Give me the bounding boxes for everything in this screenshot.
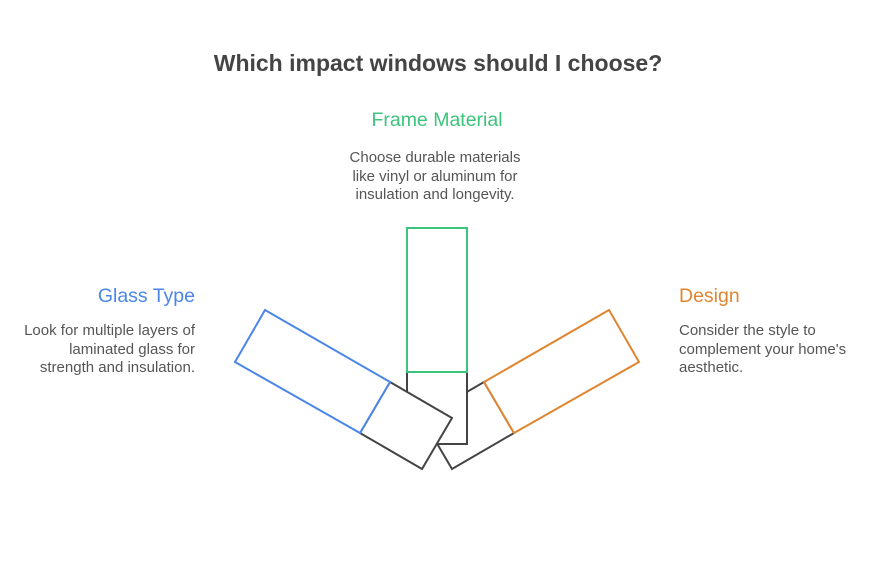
- heading: frame material: Frame Material: [371, 109, 503, 131]
- window: design (orange): [422, 310, 639, 469]
- text: design: [679, 322, 846, 376]
- text: frame material: like vinyl or aluminum for: [352, 168, 518, 184]
- text: design: aesthetic.: [679, 359, 743, 376]
- title: Which impact windows should I choose?: [214, 50, 662, 76]
- text: frame material: [350, 149, 520, 203]
- text: glass type: strength and insulation.: [40, 359, 195, 376]
- text: glass type: Look for multiple layers of: [24, 322, 195, 339]
- text: glass type: laminated glass for: [69, 340, 195, 358]
- text: frame material: insulation and longevity.: [356, 186, 514, 203]
- text: design: complement your home's: [679, 340, 846, 358]
- window: glass type (blue): [235, 310, 452, 469]
- text: frame material: Choose durable materials: [350, 149, 520, 166]
- text: glass type: [24, 322, 196, 376]
- heading: glass type: Glass Type: [98, 285, 195, 307]
- heading: design: Design: [679, 285, 740, 307]
- text: design: Consider the style to: [679, 322, 816, 339]
- window: frame material (green): [407, 228, 467, 444]
